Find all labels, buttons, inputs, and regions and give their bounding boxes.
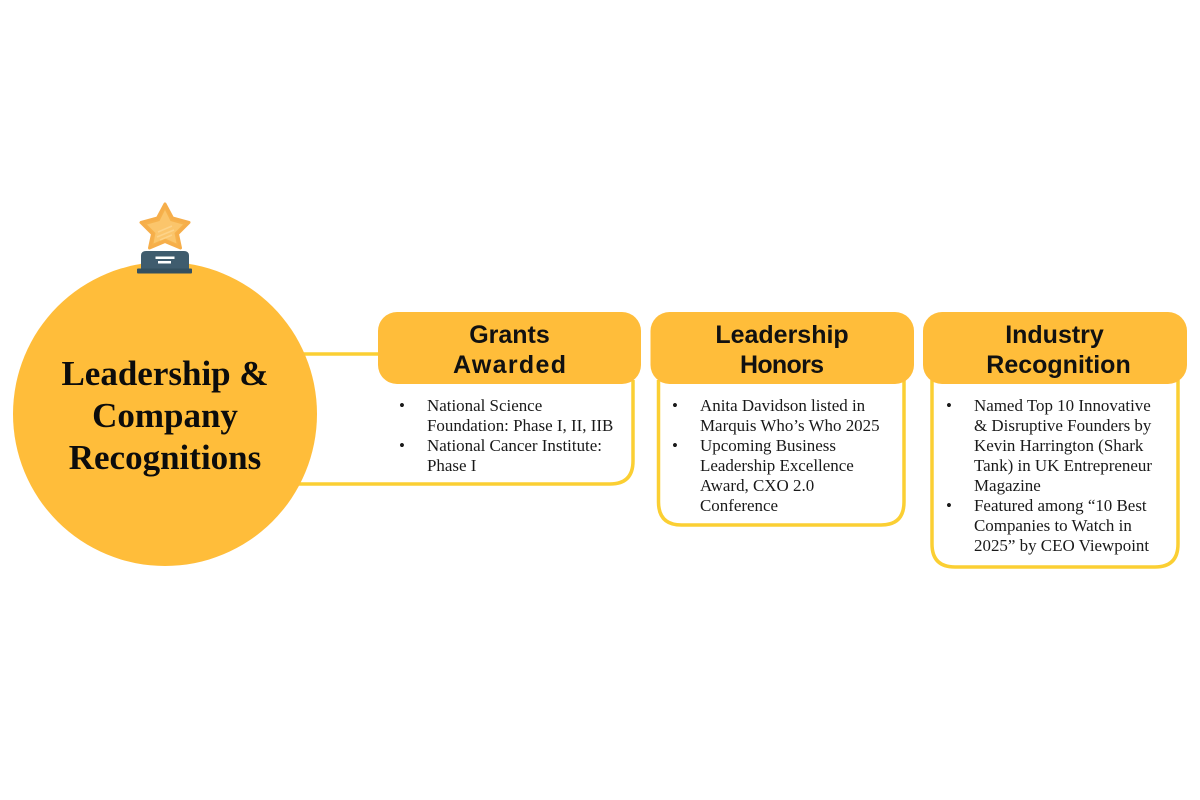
title: Company <box>92 396 238 435</box>
panel outline: Grants Awarded <box>295 380 633 484</box>
text block: Industry Recognition list: • <box>946 396 952 415</box>
text block: Grants Awarded list: National Science <box>427 396 542 415</box>
text block: Leadership Honors list: Award, CXO 2.0 <box>700 476 814 495</box>
header: Industry Recognition: Recognition <box>986 351 1131 379</box>
text block: Grants Awarded list: National Cancer Institute: <box>427 436 602 455</box>
text block: Industry Recognition list: Named Top 10 Innovative <box>974 396 1151 415</box>
text block: Leadership Honors list <box>672 396 880 515</box>
connector: top line from circle to Grants Awarded <box>300 352 380 356</box>
panel outline: Industry Recognition <box>932 380 1178 567</box>
text block: Leadership Honors list: Leadership Excellence <box>700 456 854 475</box>
title: Recognitions <box>69 438 261 477</box>
header: Grants Awarded: Grants <box>469 321 550 349</box>
panel outline: Leadership Honors <box>658 380 904 525</box>
text block: Leadership Honors list: Upcoming Business <box>700 436 836 455</box>
panel: Leadership Honors <box>650 312 914 525</box>
text block: Grants Awarded list: • <box>399 396 405 415</box>
header: Grants Awarded: Awarded <box>453 351 566 379</box>
panel: Industry Recognition <box>923 312 1187 567</box>
text block: Industry Recognition list: Featured among “10 Best <box>974 496 1147 515</box>
header: Industry Recognition: Industry <box>1005 321 1104 349</box>
main circle with title <box>13 262 317 566</box>
text block: Industry Recognition list: & Disruptive Founders by <box>974 416 1152 435</box>
text block: Industry Recognition list: Tank) in UK Entrepreneur <box>974 456 1152 475</box>
text block: Industry Recognition list: Companies to Watch in <box>974 516 1132 535</box>
text block: Leadership Honors list: Conference <box>700 496 778 515</box>
header: Industry Recognition <box>923 312 1187 384</box>
text block: Industry Recognition list: Kevin Harrington (Shark <box>974 436 1144 455</box>
title: Leadership & <box>61 354 269 393</box>
text block: Grants Awarded list: Phase I <box>427 456 477 475</box>
text block: Industry Recognition list <box>946 396 1152 555</box>
header: Grants Awarded <box>378 312 641 384</box>
header: Leadership Honors <box>650 312 914 384</box>
text block: Leadership Honors list: • <box>672 396 678 415</box>
panel: Grants Awarded <box>295 312 641 484</box>
header: Leadership Honors: Leadership <box>715 321 849 349</box>
text block: Grants Awarded list: Foundation: Phase I, II, IIB <box>427 416 613 435</box>
text block: Industry Recognition list: • <box>946 496 952 515</box>
text block: Grants Awarded list <box>399 396 613 475</box>
text block: Industry Recognition list: Magazine <box>974 476 1041 495</box>
text block: Leadership Honors list: Marquis Who’s Who 2025 <box>700 416 880 435</box>
icon: star trophy <box>137 204 192 274</box>
text block: Grants Awarded list: • <box>399 436 405 455</box>
header: Leadership Honors: Honors <box>740 351 824 379</box>
title <box>61 354 269 477</box>
text block: Leadership Honors list: • <box>672 436 678 455</box>
text block: Industry Recognition list: 2025” by CEO Viewpoint <box>974 536 1149 555</box>
text block: Leadership Honors list: Anita Davidson listed in <box>700 396 866 415</box>
